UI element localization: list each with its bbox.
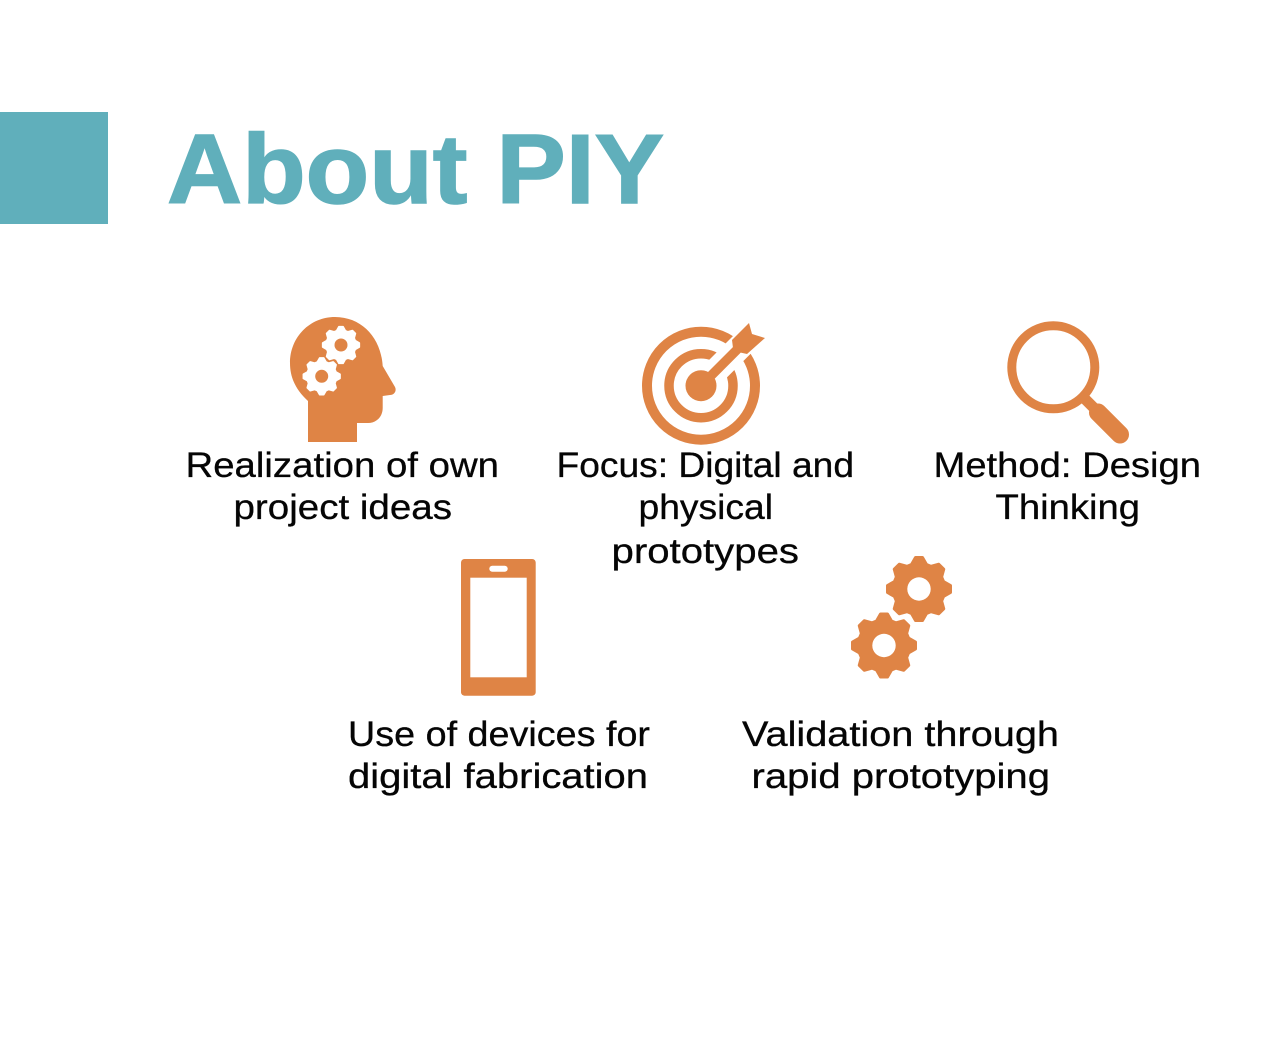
icon: target with arrow <box>647 323 765 440</box>
label line 2: rapid prototyping <box>752 757 1050 796</box>
icon: magnifying glass <box>1012 326 1120 434</box>
item: focus <box>556 323 854 571</box>
icon: smartphone <box>461 559 536 696</box>
label: Realization of own <box>186 446 499 485</box>
title: About PIY <box>167 114 664 224</box>
label: Focus: Digital and <box>556 446 854 485</box>
title accent square <box>0 112 108 224</box>
icon: head with gears <box>290 317 396 442</box>
label line 2: project ideas <box>234 488 452 527</box>
label line 2: physical <box>638 488 773 527</box>
item: validation <box>742 558 1059 796</box>
label: Validation through <box>742 715 1059 754</box>
label: Method: Design <box>934 446 1201 485</box>
item: realization of own project ideas <box>186 317 499 527</box>
icon: gears <box>852 558 950 677</box>
label: Use of devices for <box>348 715 650 754</box>
label line 2: Thinking <box>996 488 1140 527</box>
item: devices <box>348 559 650 796</box>
label line 3: prototypes <box>612 532 799 571</box>
label line 2: digital fabrication <box>348 757 648 796</box>
item: method <box>934 326 1201 527</box>
